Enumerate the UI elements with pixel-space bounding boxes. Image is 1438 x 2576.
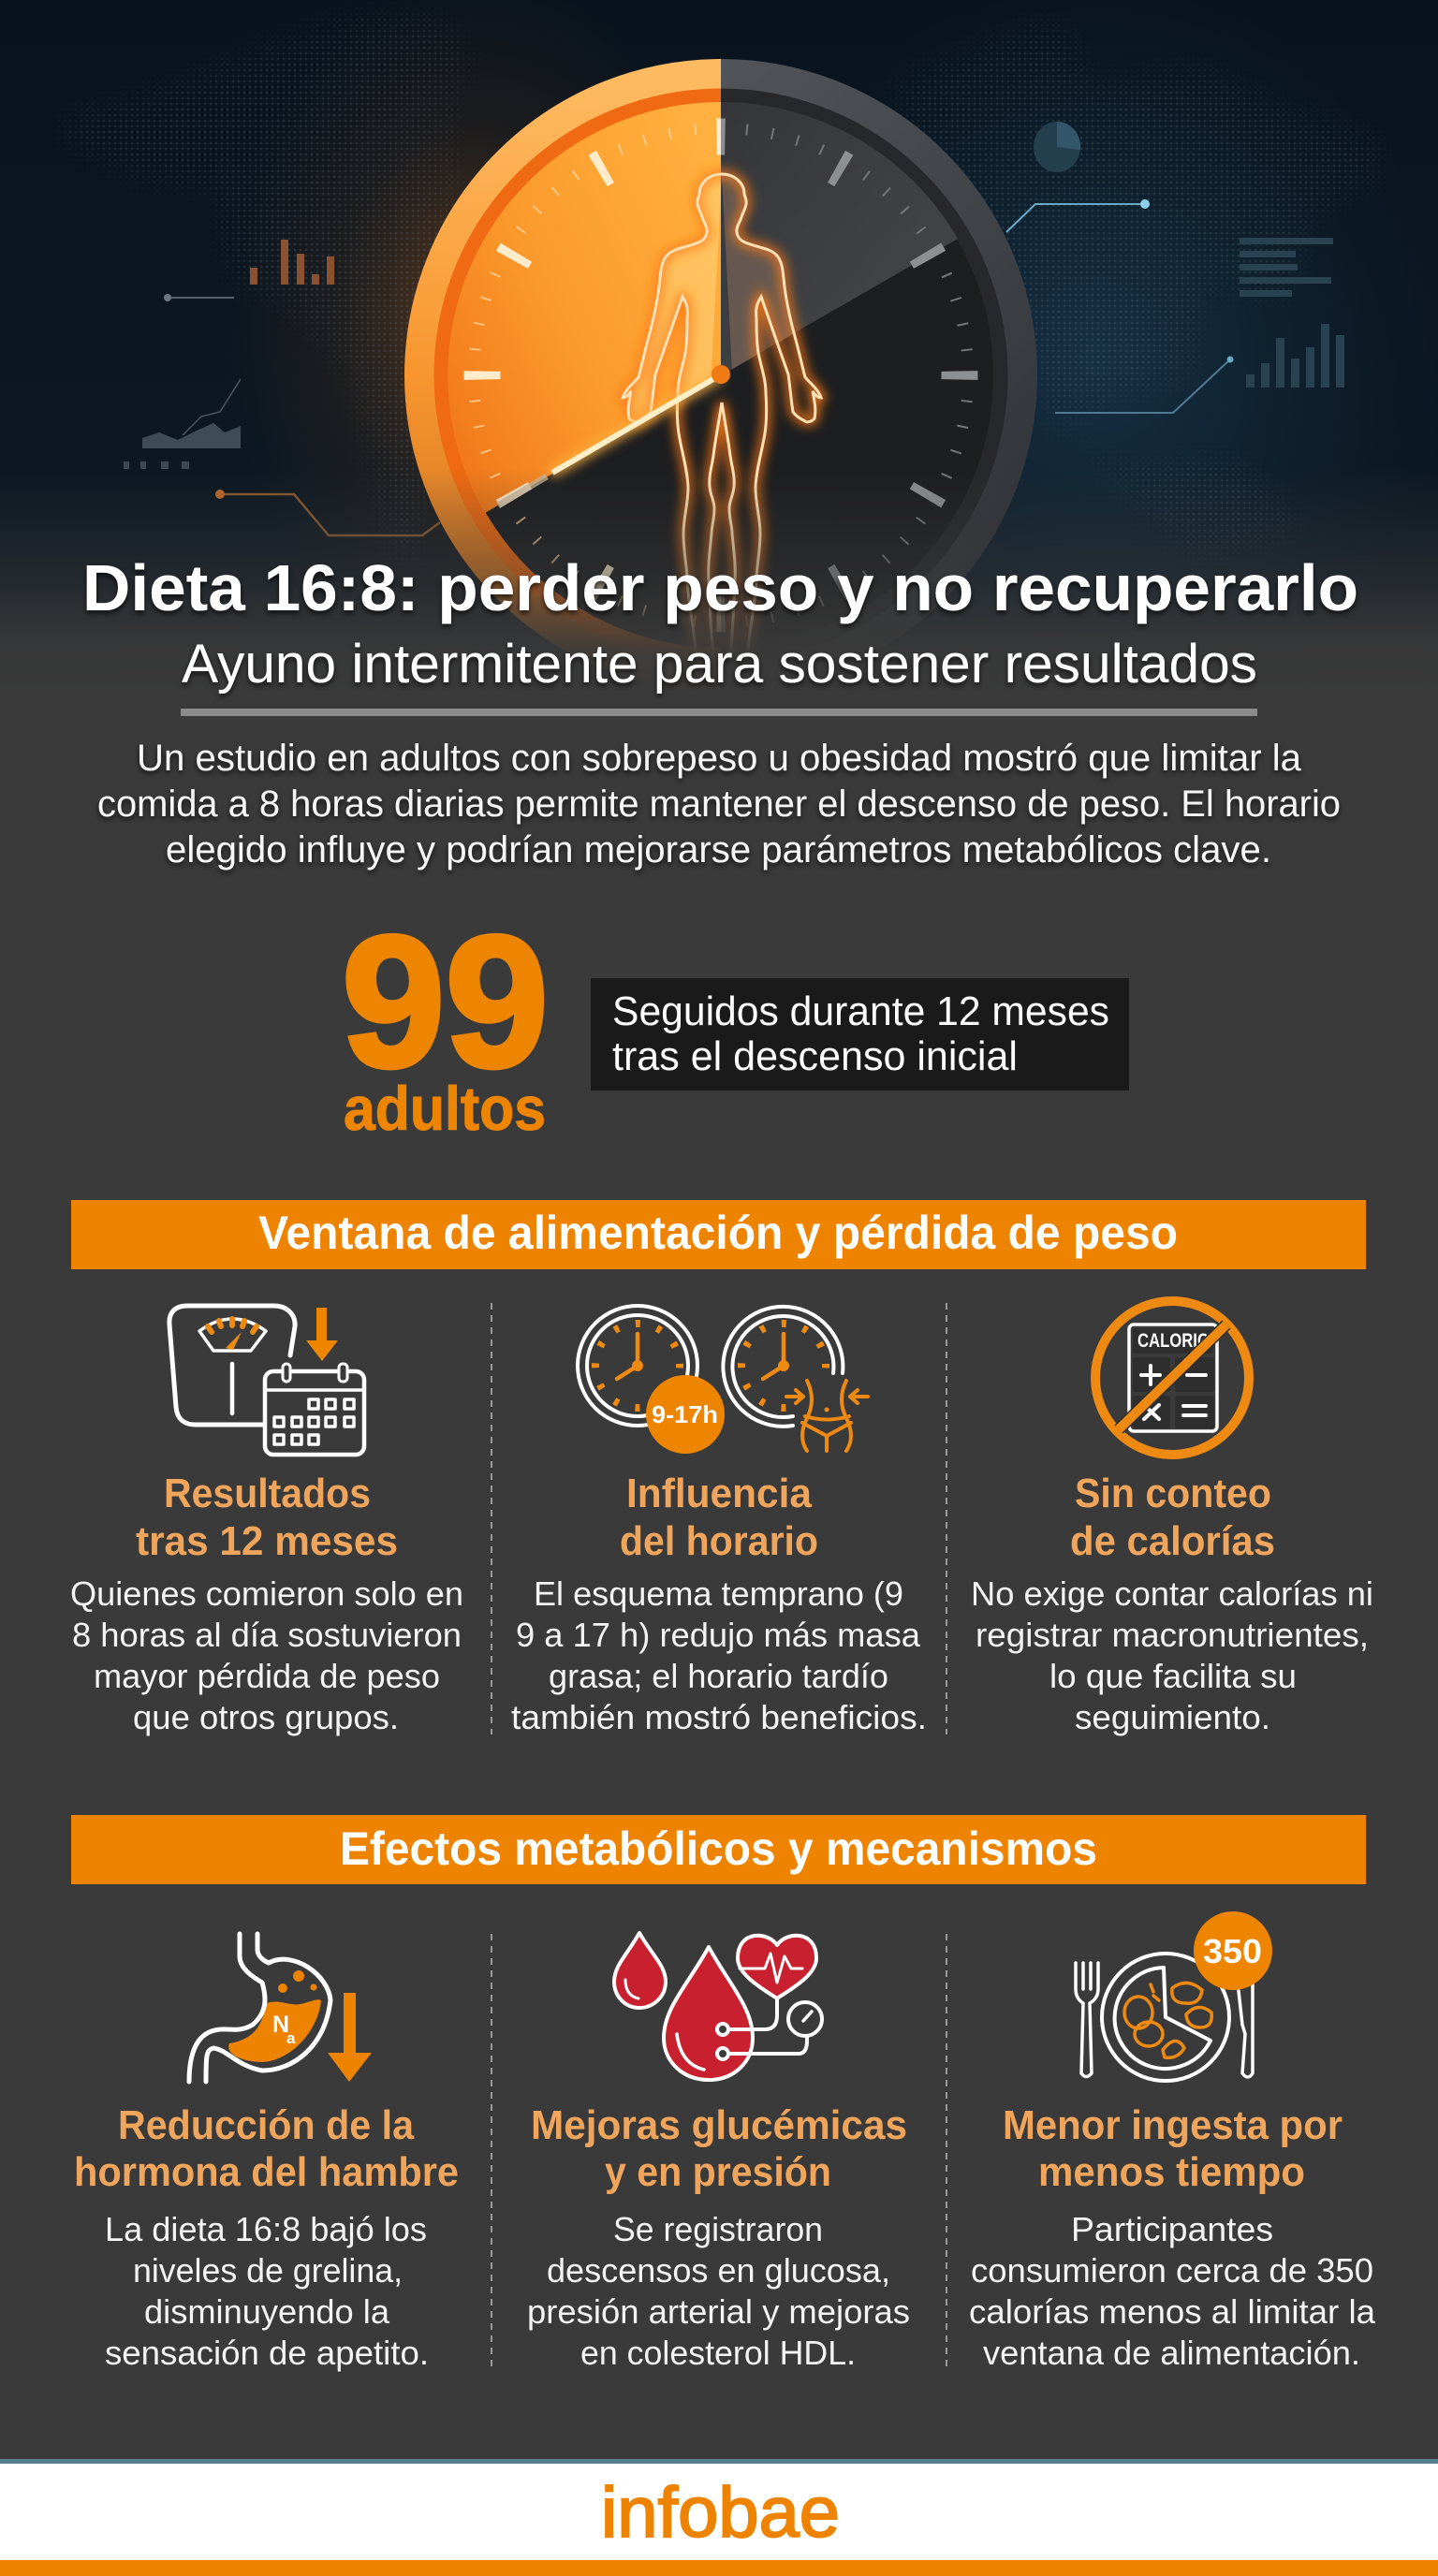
heading: menos tiempo: [1038, 2149, 1305, 2195]
icon: crossed calculator: CALORIC: [1137, 1330, 1209, 1352]
clock hand: [498, 365, 730, 505]
body text: Quienes comieron solo en: [70, 1574, 463, 1613]
heading: tras 12 meses: [136, 1518, 398, 1564]
heading: [1070, 1471, 1275, 1564]
body text: consumieron cerca de 350: [971, 2251, 1373, 2290]
right mini charts: [1006, 122, 1344, 413]
icon: plate and cutlery: 350: [1203, 1932, 1262, 1970]
body text: sensación de apetito.: [105, 2334, 429, 2372]
key stat: 99 adultos: adultos: [344, 1074, 546, 1143]
body text: El esquema temprano (9: [534, 1574, 903, 1613]
body text: disminuyendo la: [144, 2292, 390, 2331]
intro paragraph: [97, 738, 1341, 871]
clock: [419, 74, 1022, 677]
body text: 9 a 17 h) redujo más masa: [516, 1616, 921, 1654]
body text: [511, 1574, 927, 1736]
callout: seguimiento: Seguidos durante 12 meses: [612, 988, 1109, 1034]
clock ticks: [474, 128, 968, 622]
icon: crossed calculator: [1095, 1301, 1249, 1455]
panel: glucemia: [527, 1933, 910, 2372]
panel: calorias: [971, 1301, 1373, 1736]
section heading: efectos: Efectos metabólicos y mecanismos: [340, 1822, 1097, 1875]
intro paragraph: comida a 8 horas diarias permite mantener el descenso de peso. El horario: [97, 783, 1341, 825]
icon: clocks and waist: 9-17h: [652, 1400, 718, 1428]
body text: [105, 2210, 429, 2372]
body text: ventana de alimentación.: [983, 2334, 1360, 2372]
section heading: ventana: Ventana de alimentación y pérdida de peso: [258, 1207, 1178, 1259]
body text: [971, 1574, 1373, 1736]
heading: hormona del hambre: [74, 2149, 459, 2195]
icon: plate and cutlery: [1076, 1911, 1272, 2081]
heading: [74, 2102, 459, 2195]
icon: clocks and waist: [578, 1306, 868, 1454]
body text: mayor pérdida de peso: [94, 1657, 440, 1695]
left mini charts: [124, 240, 440, 535]
body text: presión arterial y mejoras: [527, 2292, 910, 2331]
world map dots: [69, 14, 1380, 549]
body text: La dieta 16:8 bajó los: [105, 2210, 427, 2248]
body text: lo que facilita su: [1049, 1657, 1297, 1695]
icon: stomach: [189, 1934, 372, 2082]
heading: [620, 1471, 818, 1564]
body text: Se registraron: [613, 2210, 823, 2248]
callout: seguimiento: tras el descenso inicial: [612, 1033, 1018, 1079]
body text: Participantes: [1071, 2210, 1273, 2248]
body text: seguimiento.: [1075, 1698, 1270, 1736]
heading: y en presión: [605, 2149, 831, 2195]
body text: 8 horas al día sostuvieron: [72, 1616, 462, 1654]
intro paragraph: Un estudio en adultos con sobrepeso u obesidad mostró que limitar la: [137, 738, 1302, 779]
body text: No exige contar calorías ni: [971, 1574, 1373, 1613]
heading: Mejoras glucémicas: [531, 2102, 907, 2148]
title: Dieta 16:8: perder peso y no recuperarlo: [82, 551, 1358, 624]
key stat: 99 adultos: 99: [342, 898, 549, 1106]
body text: descensos en glucosa,: [547, 2251, 890, 2290]
icon: scale and calendar: [169, 1306, 364, 1455]
heading: de calorías: [1070, 1518, 1275, 1564]
body text: calorías menos al limitar la: [969, 2292, 1376, 2331]
section heading: efectos: [71, 1815, 1366, 1884]
intro paragraph: elegido influye y podrían mejorarse parámetros metabólicos clave.: [166, 829, 1271, 871]
body text: niveles de grelina,: [133, 2251, 403, 2290]
heading: [531, 2102, 907, 2195]
heading: [1003, 2102, 1343, 2195]
heading: Sin conteo: [1075, 1471, 1271, 1516]
heading: Reducción de la: [118, 2102, 414, 2148]
body text: [969, 2210, 1376, 2372]
body text: [70, 1574, 463, 1736]
body text: en colesterol HDL.: [580, 2334, 856, 2372]
panel: hormona: [74, 1934, 459, 2372]
hero illustration: [0, 0, 1438, 659]
body text: grasa; el horario tardío: [549, 1657, 888, 1695]
heading: Influencia: [626, 1471, 813, 1516]
heading: Menor ingesta por: [1003, 2102, 1343, 2148]
footer: [0, 2459, 1438, 2576]
subtitle: Ayuno intermitente para sostener resultados: [182, 634, 1257, 695]
panel: ingesta: [969, 1911, 1376, 2372]
callout: seguimiento: [591, 978, 1129, 1090]
heading: Resultados: [164, 1471, 371, 1516]
body text: [527, 2210, 910, 2372]
body text: también mostró beneficios.: [511, 1698, 927, 1736]
panel: horario: [511, 1306, 927, 1736]
icon: stomach: N: [272, 2012, 289, 2038]
icon: stomach: a: [286, 2029, 296, 2047]
icon: blood drops and heart: [614, 1933, 822, 2080]
heading: del horario: [620, 1518, 818, 1564]
heading: [136, 1471, 398, 1564]
human silhouette: [623, 174, 821, 660]
logo: infobae: infobae: [601, 2473, 840, 2553]
body text: que otros grupos.: [133, 1698, 399, 1736]
section heading: ventana: [71, 1200, 1366, 1269]
body text: registrar macronutrientes,: [976, 1616, 1369, 1654]
panel: resultados: [70, 1306, 463, 1736]
